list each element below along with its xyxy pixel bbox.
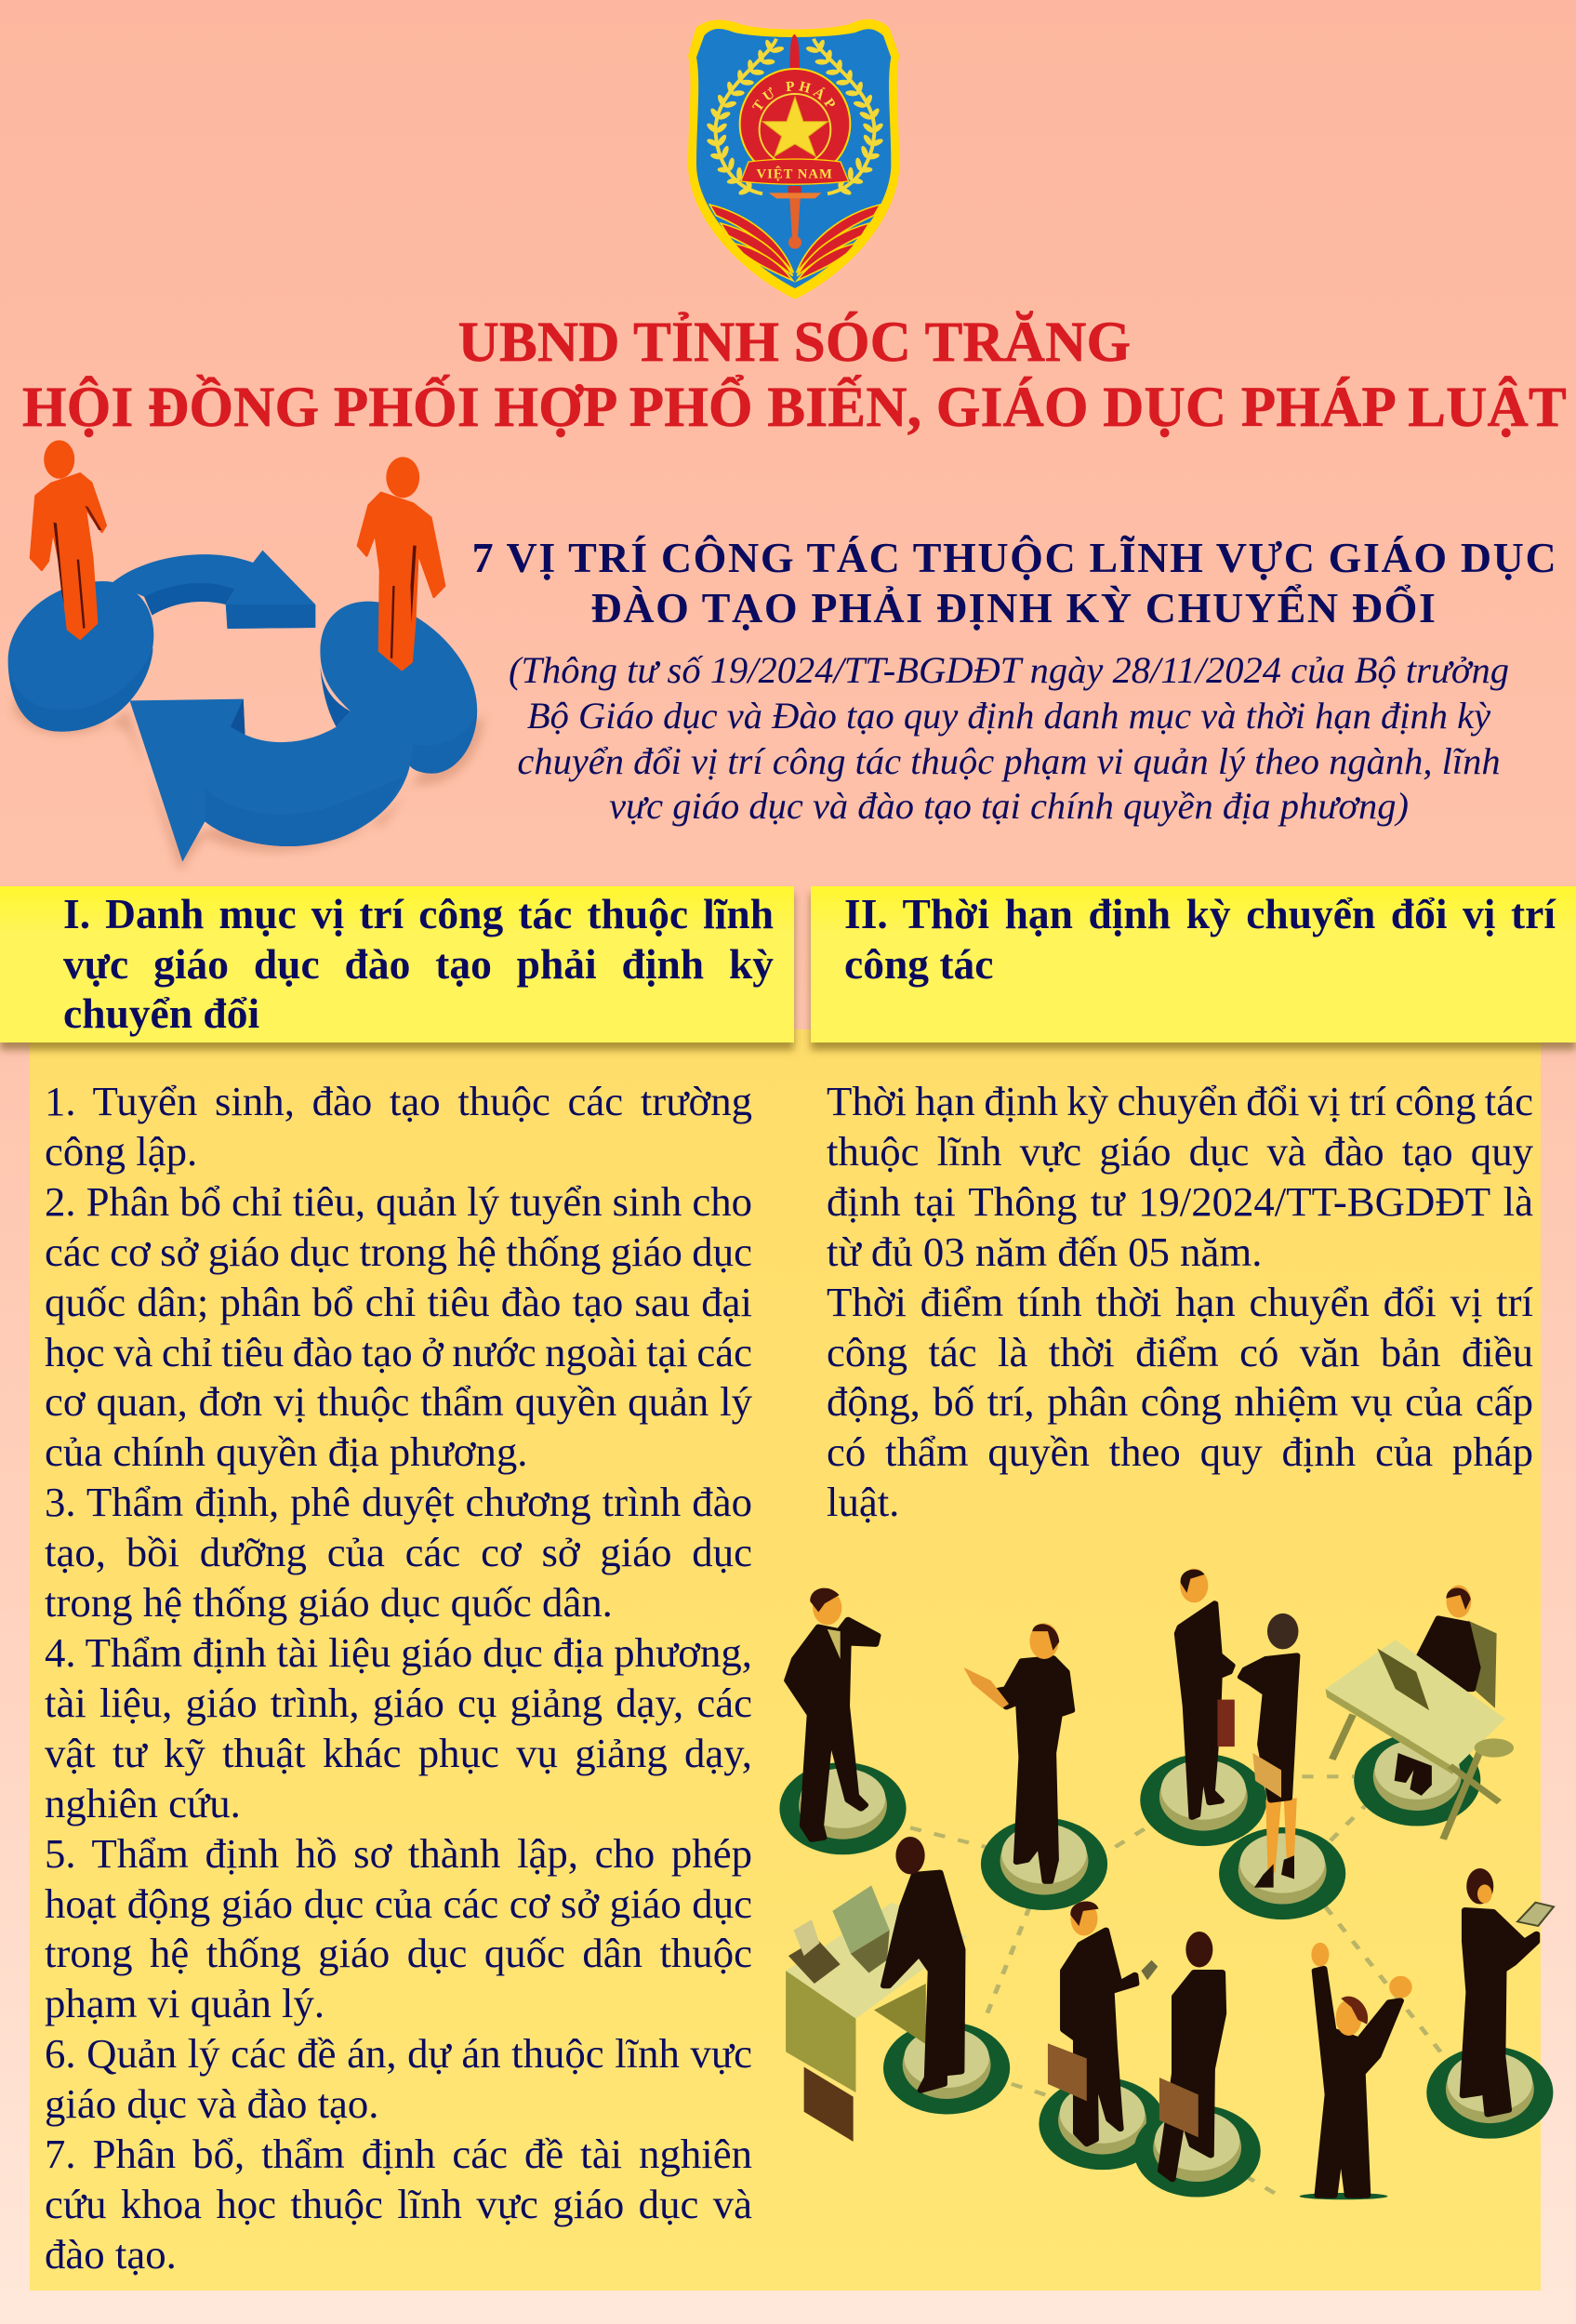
arrow shadows: [13, 685, 483, 871]
emblem ribbon: [741, 159, 849, 184]
figure: man at desk: [1325, 1586, 1514, 1839]
text block: list of seven positions: cứu khoa học thuộc lĩnh vực giáo dục và: [45, 2181, 752, 2227]
emblem wreath: [705, 37, 885, 200]
figure: man on the phone: [788, 1588, 878, 1839]
figure: man at front desk: [786, 1837, 967, 2142]
panel: body background: [30, 1029, 1541, 2291]
text block: list of seven positions: trong hệ thống giáo dục quốc dân thuộc: [45, 1930, 752, 1976]
icon: sword: [769, 34, 821, 249]
text block: transfer period: động, bố trí, phân công nhiệm vụ của cấp: [827, 1378, 1533, 1425]
heading text I: I. Danh mục vị trí công tác thuộc lĩnh: [63, 890, 774, 937]
text block: list of seven positions: đào tạo.: [45, 2231, 177, 2278]
text block: legal reference: (Thông tư số 19/2024/TT-BGDĐT ngày 28/11/2024 của Bộ trưởng: [509, 649, 1509, 691]
text block: transfer period: Thời điểm tính thời hạn chuyển đổi vị trí: [827, 1279, 1533, 1325]
title: organisation: [22, 311, 1567, 439]
text block: list of seven positions: [45, 1078, 752, 2278]
text block: list of seven positions: của chính quyền địa phương.: [45, 1428, 527, 1475]
arrow: top: [113, 551, 315, 629]
emblem text: Tư pháp: TƯ PHÁP: [751, 81, 835, 111]
text block: legal reference: Bộ Giáo dục và Đào tạo quy định danh mục và thời hạn định kỳ: [527, 695, 1490, 737]
panel: heading II: [811, 886, 1576, 1042]
figure: man from behind with briefcase: [1159, 1932, 1224, 2179]
emblem book wings: [709, 205, 881, 281]
text block: transfer period: công tác là thời điểm có văn bản điều: [827, 1329, 1533, 1375]
heading text II: [844, 890, 1556, 988]
text block: list of seven positions: vật tư kỹ thuật khác phục vụ giảng dạy,: [45, 1730, 752, 1776]
heading text I: vực giáo dục đào tạo phải định kỳ: [63, 940, 774, 988]
text block: list of seven positions: 4. Thẩm định tài liệu giáo dục địa phương,: [45, 1629, 752, 1676]
text block: list of seven positions: tài liệu, giáo trình, giáo cụ giảng dạy, các: [45, 1680, 752, 1726]
icon: rotation arrows with two people: [7, 440, 485, 869]
text block: list of seven positions: tạo, bồi dưỡng của các cơ sở giáo dục: [45, 1529, 752, 1575]
text block: list of seven positions: 2. Phân bổ chỉ tiêu, quản lý tuyển sinh cho: [45, 1178, 752, 1225]
text block: list of seven positions: 6. Quản lý các đề án, dự án thuộc lĩnh vực: [45, 2030, 752, 2077]
figure: man with raised arms: [1311, 1943, 1412, 2196]
figure: man shaking hands: [1177, 1569, 1235, 1817]
figure: woman: [1241, 1614, 1298, 1888]
text block: list of seven positions: trong hệ thống giáo dục quốc dân.: [45, 1579, 613, 1626]
text block: transfer period: luật.: [827, 1479, 899, 1525]
heading text I: chuyển đổi: [63, 989, 259, 1037]
heading: main subject: 7 VỊ TRÍ CÔNG TÁC THUỘC LĨNH VỰC GIÁO DỤC: [472, 534, 1557, 581]
arrow: bottom: [129, 602, 477, 862]
text block: list of seven positions: phạm vi quản lý.: [45, 1980, 324, 2026]
text block: transfer period: [827, 1078, 1533, 1525]
figure: man with tablet: [1463, 1868, 1554, 2114]
heading: main subject: [472, 534, 1557, 631]
text block: list of seven positions: quốc dân; phân bổ chỉ tiêu đào tạo sau đại: [45, 1279, 752, 1325]
panel: heading I: [0, 886, 794, 1042]
title: organisation: UBND TỈNH SÓC TRĂNG: [458, 312, 1131, 374]
dashed connections: [910, 1776, 1448, 2198]
emblem ribbon: VIỆT NAM: [757, 166, 833, 181]
platform: left: [8, 581, 153, 732]
heading: main subject: ĐÀO TẠO PHẢI ĐỊNH KỲ CHUYỂN ĐỔI: [590, 584, 1437, 631]
figure: left person: [31, 440, 106, 639]
text block: transfer period: thuộc lĩnh vực giáo dục và đào tạo quy: [827, 1128, 1533, 1175]
figure: man gesturing: [964, 1623, 1072, 1881]
text block: legal reference: vực giáo dục và đào tạo tại chính quyền địa phương): [609, 785, 1409, 827]
text block: transfer period: có thẩm quyền theo quy định của pháp: [827, 1428, 1533, 1475]
illustration: business people network: [779, 1568, 1556, 2200]
text block: list of seven positions: cơ quan, đơn vị thuộc thẩm quyền quản lý: [45, 1378, 752, 1425]
text block: list of seven positions: 7. Phân bổ, thẩm định các đề tài nghiên: [45, 2131, 752, 2177]
text block: list of seven positions: 1. Tuyển sinh, đào tạo thuộc các trường: [45, 1078, 752, 1124]
text block: list of seven positions: công lập.: [45, 1128, 197, 1175]
heading text I: [63, 890, 774, 1037]
text block: legal reference: [509, 649, 1509, 827]
icon: star: [762, 97, 828, 156]
icon: justice emblem: [688, 19, 900, 299]
heading text II: công tác: [844, 940, 993, 988]
title: organisation: HỘI ĐỒNG PHỐI HỢP PHỔ BIẾN, GIÁO DỤC PHÁP LUẬT: [22, 377, 1567, 439]
text block: list of seven positions: 3. Thẩm định, phê duyệt chương trình đào: [45, 1479, 752, 1525]
figure: right person: [358, 457, 444, 670]
figure: man with phone and briefcase: [1048, 1901, 1158, 2144]
text block: list of seven positions: các cơ sở giáo dục trong hệ thống giáo dục: [45, 1228, 752, 1275]
text block: transfer period: định tại Thông tư 19/2024/TT-BGDĐT là: [827, 1178, 1533, 1225]
platforms: [779, 1733, 1553, 2199]
text block: list of seven positions: 5. Thẩm định hồ sơ thành lập, cho phép: [45, 1830, 752, 1877]
text block: transfer period: Thời hạn định kỳ chuyển đổi vị trí công tác: [827, 1078, 1533, 1124]
text block: list of seven positions: hoạt động giáo dục của các cơ sở giáo dục: [45, 1880, 752, 1927]
heading text II: II. Thời hạn định kỳ chuyển đổi vị trí: [844, 890, 1556, 937]
text block: list of seven positions: nghiên cứu.: [45, 1780, 241, 1826]
text block: legal reference: chuyển đổi vị trí công tác thuộc phạm vi quản lý theo ngành, lĩnh: [517, 740, 1501, 782]
text block: transfer period: từ đủ 03 năm đến 05 năm.: [827, 1228, 1262, 1275]
text block: list of seven positions: giáo dục và đào tạo.: [45, 2080, 379, 2127]
text block: list of seven positions: học và chỉ tiêu đào tạo ở nước ngoài tại các: [45, 1329, 752, 1375]
